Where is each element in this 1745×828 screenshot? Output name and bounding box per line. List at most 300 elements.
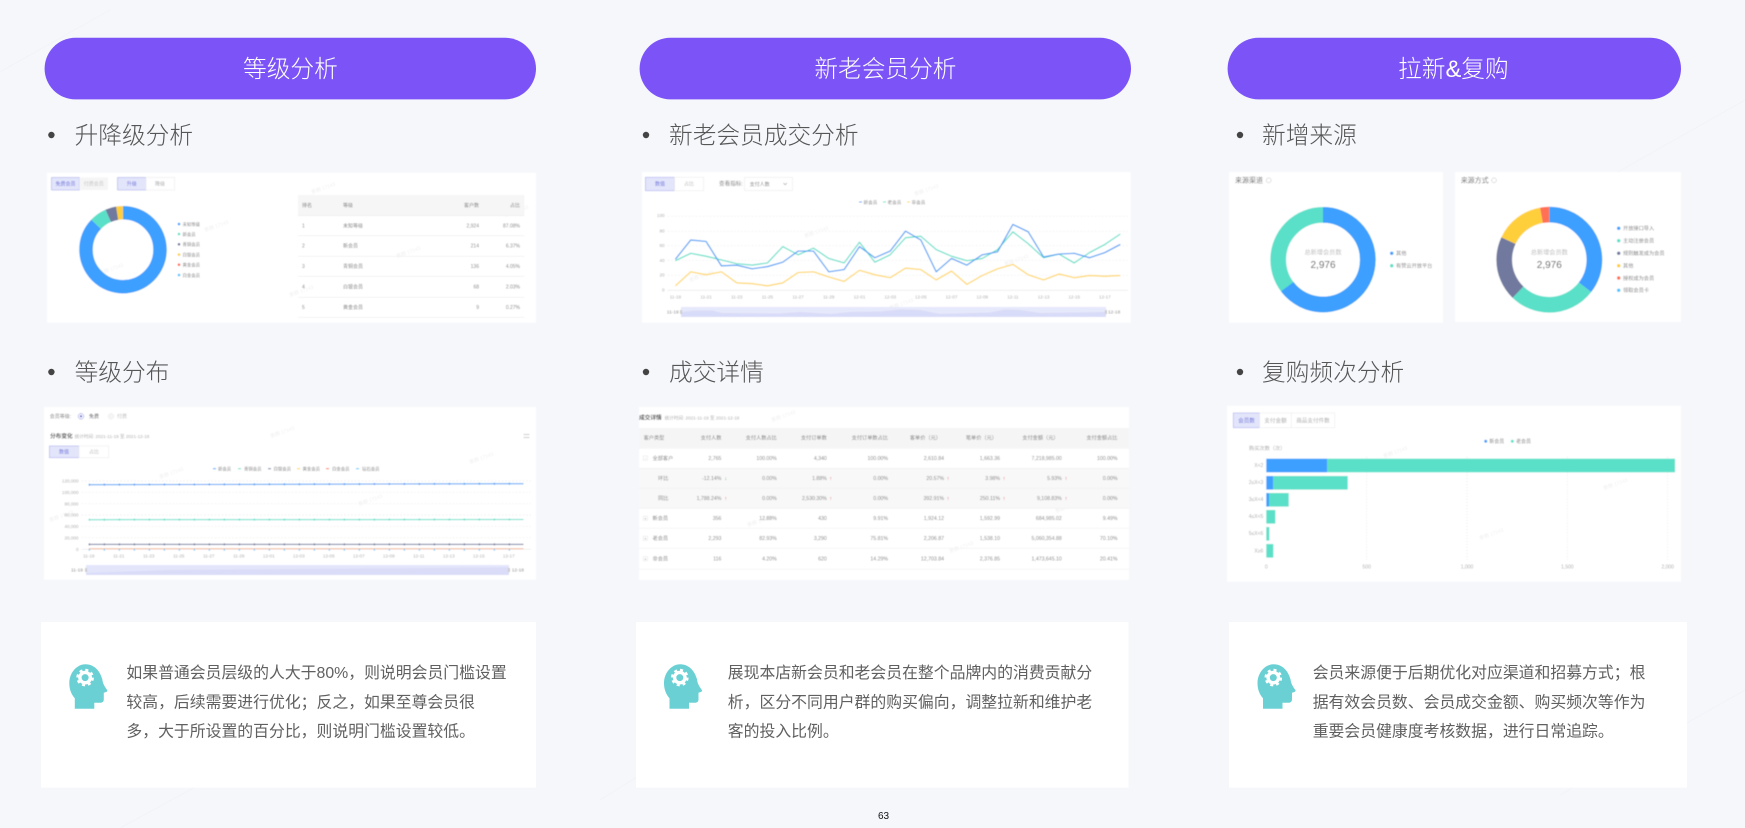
table rows: 75.81% [870, 536, 888, 542]
y axis labels and grid: X<2 [1254, 463, 1264, 469]
legend: 新会员 [864, 199, 878, 206]
table rows: 2,610.84 [924, 456, 944, 462]
x axis labels: 12-15 [1068, 294, 1081, 300]
insight text: 较高，后续需要进行优化；反之，如果至尊会员很 [126, 693, 475, 711]
table rows: 0.00% [762, 496, 777, 502]
donut legend: 其他 [1623, 262, 1633, 270]
legend [213, 465, 380, 472]
insight text: 会员来源便于后期优化对应渠道和招募方式；根 [1313, 663, 1646, 682]
table rows: ↑ [1065, 496, 1067, 502]
x axis labels: 12-03 [884, 294, 897, 300]
table title: 统计时间: 2021-11-19 至 2021-12-18 [665, 415, 740, 422]
table rows: 7,218,985.00 [1032, 456, 1062, 462]
table rows: 9.91% [873, 516, 888, 522]
x axis labels [83, 553, 515, 558]
table rows: 20.57% [926, 476, 944, 482]
ranking table: 5 [302, 305, 305, 311]
ranking table: 新会员 [343, 243, 358, 250]
table rows: 0.00% [873, 476, 888, 482]
legend: 老会员 [888, 199, 902, 206]
table rows: 1,538.10 [980, 536, 1000, 542]
tab buttons: 会员数 [1238, 416, 1255, 424]
table rows: ↑ [1065, 476, 1067, 482]
x axis labels: 0 [1265, 564, 1268, 570]
ranking table: 青铜会员 [343, 263, 363, 270]
table rows: 9,108.83% [1037, 496, 1062, 502]
column header: 新老会员分析: 新老会员分析 [814, 56, 956, 83]
legend [859, 199, 926, 206]
donut chart: methods [1504, 215, 1594, 305]
table rows: 1,788.24% [697, 496, 722, 502]
table rows: 100.00% [756, 456, 777, 462]
x axis labels: 11-29 [233, 553, 245, 558]
donut legend: 领取会员卡 [1623, 286, 1649, 294]
ranking table: 68 [473, 284, 479, 290]
tab buttons and selector: 数值 [655, 181, 665, 188]
table header: 支付金额占比 [1086, 434, 1118, 442]
panel: 升降级分析 screenshot: 景群 17143 [288, 284, 315, 299]
table rows: - [645, 456, 647, 461]
icon: head with gear [1258, 664, 1296, 709]
insight text [728, 664, 1092, 740]
stacked bars [1266, 459, 1675, 558]
insight text: 重要会员健康度考核数据，进行日常追踪。 [1313, 722, 1614, 740]
legend: 新会员 [218, 465, 232, 472]
panel: 成交详情 table screenshot: 景群 17143 [746, 514, 773, 529]
table rows: ↑ [947, 476, 949, 482]
table rows: 老会员 [652, 534, 668, 542]
donut legend: 授权成为会员 [1623, 274, 1654, 282]
x axis labels: 12-07 [353, 553, 365, 558]
tab buttons [49, 446, 109, 458]
panel: 来源方式 donut screenshot [1455, 172, 1681, 322]
panel: 复购频次分析 bar chart screenshot: 景群 17143 [1602, 477, 1629, 492]
tab buttons: 免费会员 [55, 181, 76, 188]
panel: 等级分析 insight card [41, 622, 536, 788]
table rows: 70.10% [1100, 536, 1118, 542]
insight text: 展现本店新会员和老会员在整个品牌内的消费贡献分 [728, 664, 1092, 682]
table rows: 392.91% [924, 496, 944, 502]
donut legend [1390, 249, 1432, 270]
column header: 等级分析 [45, 38, 536, 99]
level filter radios: 会员等级: [50, 413, 71, 420]
panel: 复购频次分析 bar chart screenshot [1227, 406, 1681, 582]
donut chart: channels [1278, 215, 1368, 305]
ranking table: 黄金会员 [343, 304, 363, 311]
panel: 升降级分析 screenshot: 景群 17143 [503, 204, 530, 219]
panel: 升降级分析 screenshot: 景群 17143 [203, 219, 230, 234]
x axis labels: 12-01 [854, 294, 866, 300]
tab buttons and selector: 支付人数 [750, 181, 770, 188]
x axis labels: 12-17 [1099, 294, 1111, 300]
y axis and grid: 100 [657, 213, 665, 218]
heading: 新老会员成交分析: 新老会员成交分析 [669, 122, 859, 150]
ranking table: 2 [302, 244, 305, 250]
chart title: 统计时间: 2021-11-19 至 2021-12-18 [75, 433, 150, 440]
ranking table [298, 195, 524, 317]
table rows: 0.00% [873, 496, 888, 502]
y axis and grid: 120,000 [62, 479, 79, 484]
y axis labels and grid: 5≤X<6 [1249, 531, 1264, 537]
heading: 成交详情: 成交详情 [669, 360, 764, 386]
x axis labels: 11-25 [173, 553, 185, 558]
table rows: 5.93% [1047, 476, 1062, 482]
table rows: 2,530.30% [802, 496, 827, 502]
range slider [71, 565, 524, 575]
panel: 等级分布 line chart screenshot: 景群 17143 [158, 466, 185, 481]
table rows: 3.98% [985, 476, 1000, 482]
heading: 复购频次分析: 复购频次分析 [1262, 360, 1404, 386]
panel: 拉新复购 insight card [1229, 622, 1687, 788]
panel: 成交详情 table screenshot: 景群 17143 [770, 409, 797, 424]
panel: 升降级分析 screenshot: 景群 17143 [395, 245, 422, 260]
table rows: 非会员 [652, 554, 668, 562]
table rows: ↑ [829, 476, 832, 482]
insight text [1313, 663, 1646, 740]
x axis labels: 11-29 [823, 294, 835, 300]
x axis labels: 12-03 [293, 553, 305, 558]
x axis labels: 500 [1363, 564, 1371, 570]
table rows: 1.88% [812, 476, 827, 482]
x axis labels: 12-17 [503, 553, 515, 558]
range slider: 12-18 [1108, 310, 1121, 316]
table rows: 12.88% [759, 516, 777, 522]
panel: 新老会员成交分析 line chart screenshot: 景群 17143 [1003, 253, 1030, 268]
table rows: ↑ [829, 496, 832, 502]
panel: 成交详情 table screenshot: 景群 17143 [1054, 500, 1081, 515]
table rows: 12,703.84 [921, 556, 944, 562]
x axis labels: 11-27 [792, 294, 804, 300]
comparison row background [639, 468, 1129, 508]
line series [89, 484, 524, 550]
table rows: 1,924.12 [924, 516, 944, 522]
table rows: 1,592.99 [980, 516, 1000, 522]
table rows: 2,765 [708, 456, 722, 462]
x axis labels [670, 294, 1111, 300]
y axis and grid [62, 479, 531, 552]
panel: 新老会员成交分析 line chart screenshot: 景群 17143 [803, 225, 830, 240]
donut legend: 白银会员 [182, 251, 201, 258]
x axis labels: 12-11 [413, 553, 425, 558]
legend: 老会员 [1516, 438, 1531, 445]
table rows: 620 [818, 556, 827, 562]
donut legend: 白金会员 [182, 272, 201, 279]
panel: 升降级分析 screenshot: 景群 17143 [310, 181, 337, 196]
ranking table: 占比 [510, 202, 520, 209]
y axis and grid: 100,000 [62, 490, 79, 495]
tab buttons and selector [645, 177, 793, 191]
ranking table: 214 [471, 244, 479, 250]
x axis labels: 11-25 [762, 294, 774, 300]
heading: 升降级分析: 升降级分析 [75, 122, 193, 150]
table header: 支付金额（元） [1022, 434, 1059, 442]
x axis labels: 12-15 [473, 553, 485, 558]
heading: 等级分布: 等级分布 [75, 360, 169, 386]
ranking table: 9 [476, 305, 479, 311]
donut legend: 主动注册会员 [1623, 237, 1654, 245]
ranking table: 87.08% [503, 224, 521, 230]
table title [639, 414, 740, 422]
donut legend [1617, 224, 1665, 294]
legend: 非会员 [912, 199, 926, 206]
x axis labels: 11-23 [143, 553, 155, 558]
table rows: 116 [713, 556, 722, 562]
panel: 升降级分析 screenshot: 景群 17143 [98, 262, 125, 277]
table rows: 同比 [658, 494, 668, 502]
table header: 支付人数 [701, 434, 722, 442]
table rows: 9.49% [1103, 516, 1118, 522]
panel: 等级分布 line chart screenshot [44, 407, 536, 580]
donut centre total: 总新增会员数 [1531, 248, 1569, 256]
column header: 拉新&复购: 拉新&复购 [1398, 56, 1509, 83]
x axis labels: 12-01 [263, 553, 275, 558]
table rows: 2,376.85 [980, 556, 1000, 562]
table rows: 0.00% [1103, 496, 1118, 502]
table rows: ↓ [724, 476, 727, 482]
table rows: 20.41% [1100, 556, 1118, 562]
legend: 青铜会员 [244, 465, 262, 472]
table rows: 3,290 [814, 536, 827, 542]
x axis labels: 12-07 [946, 294, 958, 300]
ranking table: 2.03% [506, 284, 521, 290]
panel: 新老会员分析 insight card [636, 622, 1128, 788]
donut legend [178, 221, 201, 279]
y axis and grid: 60 [659, 243, 665, 248]
panel: 新老会员成交分析 line chart screenshot: 景群 17143 [913, 183, 940, 198]
ranking table: 未知等级 [343, 222, 363, 230]
x axis labels: 12-05 [323, 553, 335, 558]
table rows: 430 [818, 516, 827, 522]
donut centre total: 2,976 [1537, 260, 1562, 271]
insight text [126, 664, 507, 740]
table rows: 4.20% [762, 556, 777, 562]
y axis and grid: 60,000 [64, 513, 79, 518]
donut legend: 开放接口导入 [1623, 224, 1654, 232]
panel: 等级分布 line chart screenshot: 景群 17143 [48, 509, 75, 524]
legend: 钻石会员 [362, 465, 380, 472]
panel: 新老会员成交分析 line chart screenshot: 景群 17143 [888, 297, 915, 312]
table rows [639, 454, 1129, 569]
tab buttons [1233, 413, 1335, 428]
tab buttons: 占比 [89, 449, 99, 456]
table rows: ↑ [1003, 496, 1005, 502]
table rows: ↑ [1003, 476, 1005, 482]
table rows: 684,985.02 [1036, 516, 1062, 522]
ranking table: 2,924 [466, 224, 479, 230]
legend: 白金会员 [332, 465, 350, 472]
ranking table: 4 [302, 284, 305, 290]
x axis labels: 12-09 [976, 294, 989, 300]
panel: 升降级分析 screenshot [47, 173, 536, 323]
column header: 拉新&复购 [1228, 38, 1681, 99]
table header: 支付订单数占比 [852, 434, 888, 442]
insight text: 如果普通会员层级的人大于80%，则说明会员门槛设置 [126, 664, 507, 682]
table header [639, 428, 1129, 449]
panel: 来源渠道 donut screenshot [1229, 172, 1443, 323]
range slider: 12-18 [512, 568, 524, 574]
tab buttons: 数值 [59, 449, 69, 456]
x axis labels: 11-19 [670, 294, 682, 300]
tab buttons: 升级 [127, 181, 137, 188]
x axis labels: 11-19 [83, 553, 95, 558]
tab buttons and selector: 查看指标: [719, 180, 743, 188]
ranking table: 客户数 [464, 202, 479, 209]
panel: 新老会员成交分析 line chart screenshot [642, 172, 1131, 323]
y axis labels and grid: X≥6 [1254, 548, 1264, 554]
panel: 成交详情 table screenshot: 景群 17143 [948, 540, 975, 555]
ranking table: 3 [302, 264, 305, 270]
insight text: 析，区分不同用户群的购买偏向，调整拉新和维护老 [728, 693, 1092, 711]
ranking table: 136 [471, 264, 479, 270]
table rows: 250.11% [980, 496, 1000, 502]
tab buttons: 商品支付件数 [1296, 416, 1330, 424]
ranking table: 1 [302, 224, 305, 230]
table rows: 100.00% [1097, 456, 1118, 462]
y axis labels and grid [1249, 444, 1668, 560]
panel: 复购频次分析 bar chart screenshot: 景群 17143 [1382, 445, 1409, 460]
panel title: 来源渠道 [1235, 176, 1263, 185]
x axis labels: 2,000 [1661, 564, 1674, 570]
insight text: 多，大于所设置的百分比，则说明门槛设置较低。 [126, 722, 475, 740]
ranking table: 0.27% [506, 305, 521, 311]
x axis labels: 12-11 [1007, 294, 1019, 300]
panel: 等级分布 line chart screenshot: 景群 17143 [357, 493, 384, 508]
x axis labels: 11-21 [113, 553, 125, 558]
range slider: 11-19 [667, 310, 679, 316]
donut centre total: 2,976 [1310, 260, 1336, 271]
x axis labels: 1,500 [1561, 564, 1574, 570]
table rows: + [644, 516, 647, 521]
table rows: 全部客户 [652, 454, 673, 462]
y axis and grid: 0 [662, 288, 665, 293]
level filter radios [50, 413, 127, 420]
table rows: ↑ [947, 496, 949, 502]
table header: 客户类型 [644, 434, 664, 442]
range slider [667, 307, 1121, 317]
ranking table: 等级 [343, 202, 353, 209]
insight text: 据有效会员数、会员成交金额、购买频次等作为 [1313, 693, 1645, 711]
level filter radios: 免费 [89, 413, 99, 420]
ranking table: 4.05% [506, 264, 521, 270]
x axis labels: 11-23 [731, 294, 743, 300]
donut legend: 规则触发成为会员 [1623, 249, 1665, 257]
table rows: 4,340 [814, 456, 827, 462]
chart title [50, 432, 530, 440]
table header: 笔单价（元） [966, 434, 997, 442]
panel title [1461, 176, 1496, 185]
tab buttons and selector: 占比 [684, 181, 694, 188]
table header: 客单价（元） [910, 434, 941, 442]
y axis and grid: 40 [659, 258, 665, 263]
table rows: 环比 [658, 474, 668, 482]
column header: 新老会员分析 [640, 38, 1131, 99]
donut centre total: 总新增会员数 [1304, 248, 1342, 256]
table rows: ↑ [724, 496, 727, 502]
donut chart: level shares [86, 213, 160, 287]
donut legend: 有赞云开放平台 [1396, 262, 1432, 270]
line series [675, 224, 1120, 286]
panel: 成交详情 table screenshot [639, 407, 1129, 580]
table rows: 14.29% [870, 556, 888, 562]
y axis and grid [657, 213, 1128, 293]
table header: 支付人数占比 [746, 434, 777, 442]
panel title: 来源方式 [1461, 176, 1489, 185]
x axis labels: 1,000 [1461, 564, 1473, 570]
x axis labels: 11-27 [203, 553, 215, 558]
donut legend: 青铜会员 [182, 241, 201, 248]
donut centre total [1531, 248, 1569, 271]
legend: 新会员 [1489, 438, 1504, 445]
donut legend: 黄金会员 [182, 262, 201, 268]
table header: 支付订单数 [801, 434, 828, 442]
y axis and grid: 80,000 [64, 501, 79, 506]
table rows: 1,473,645.10 [1032, 556, 1062, 562]
x axis labels: 11-21 [700, 294, 712, 300]
panel title [1235, 176, 1271, 185]
x axis labels: 12-09 [383, 553, 395, 558]
donut legend: 新会员 [182, 231, 196, 238]
column header: 等级分析: 等级分析 [243, 56, 338, 83]
legend: 黄金会员 [302, 465, 321, 472]
table rows: 新会员 [652, 514, 668, 522]
table rows: 2,293 [708, 536, 722, 542]
x axis labels [1265, 564, 1674, 570]
y axis and grid: 20 [659, 273, 665, 278]
panel: 新老会员成交分析 line chart screenshot: 景群 17143 [688, 269, 715, 284]
x axis labels: 12-05 [915, 294, 927, 300]
donut legend: 未知等级 [182, 221, 201, 228]
donut legend: 其他 [1396, 249, 1406, 257]
table rows: 0.00% [1103, 476, 1118, 482]
panel: 复购频次分析 bar chart screenshot: 景群 17143 [1478, 527, 1505, 542]
ranking table: 排名 [302, 202, 312, 209]
y axis and grid: 0 [76, 547, 79, 552]
legend: 白银会员 [274, 465, 292, 472]
ranking table: 白银会员 [343, 284, 363, 290]
table rows: 82.93% [759, 536, 777, 542]
y axis and grid: 80 [659, 228, 665, 233]
icon: head with gear [69, 664, 107, 709]
page number: 63 [878, 811, 889, 822]
table rows: + [644, 536, 647, 541]
icon: head with gear [664, 664, 702, 709]
chart title: 分布变化 [50, 432, 73, 440]
y axis and grid: 40,000 [64, 524, 79, 529]
insight text: 客的投入比例。 [728, 722, 839, 740]
table rows: 5,060,354.88 [1032, 536, 1062, 542]
x axis labels: 12-13 [443, 553, 455, 558]
table rows: -12.14% [702, 476, 722, 482]
range slider: 11-19 [71, 568, 83, 574]
tab buttons: 降级 [155, 181, 165, 188]
heading: 新增来源: 新增来源 [1262, 122, 1357, 150]
tab buttons: 支付金额 [1264, 416, 1287, 424]
y axis and grid: 20,000 [64, 535, 79, 540]
y axis labels and grid: 2≤X<3 [1249, 480, 1264, 486]
y axis labels and grid: 3≤X<4 [1249, 497, 1264, 503]
panel: 等级分布 line chart screenshot: 景群 17143 [269, 425, 296, 440]
table rows: 356 [713, 516, 722, 522]
x axis labels: 12-13 [1038, 294, 1050, 300]
table title: 成交详情 [639, 414, 662, 422]
y axis labels and grid: 购买次数（次） [1249, 444, 1285, 452]
table rows: 0.00% [762, 476, 777, 482]
level filter radios: 付费 [117, 413, 127, 420]
table rows: 2,206.87 [924, 536, 944, 542]
table rows: 100.00% [868, 456, 888, 462]
tab buttons [52, 178, 174, 190]
y axis labels and grid: 4≤X<5 [1249, 514, 1264, 520]
